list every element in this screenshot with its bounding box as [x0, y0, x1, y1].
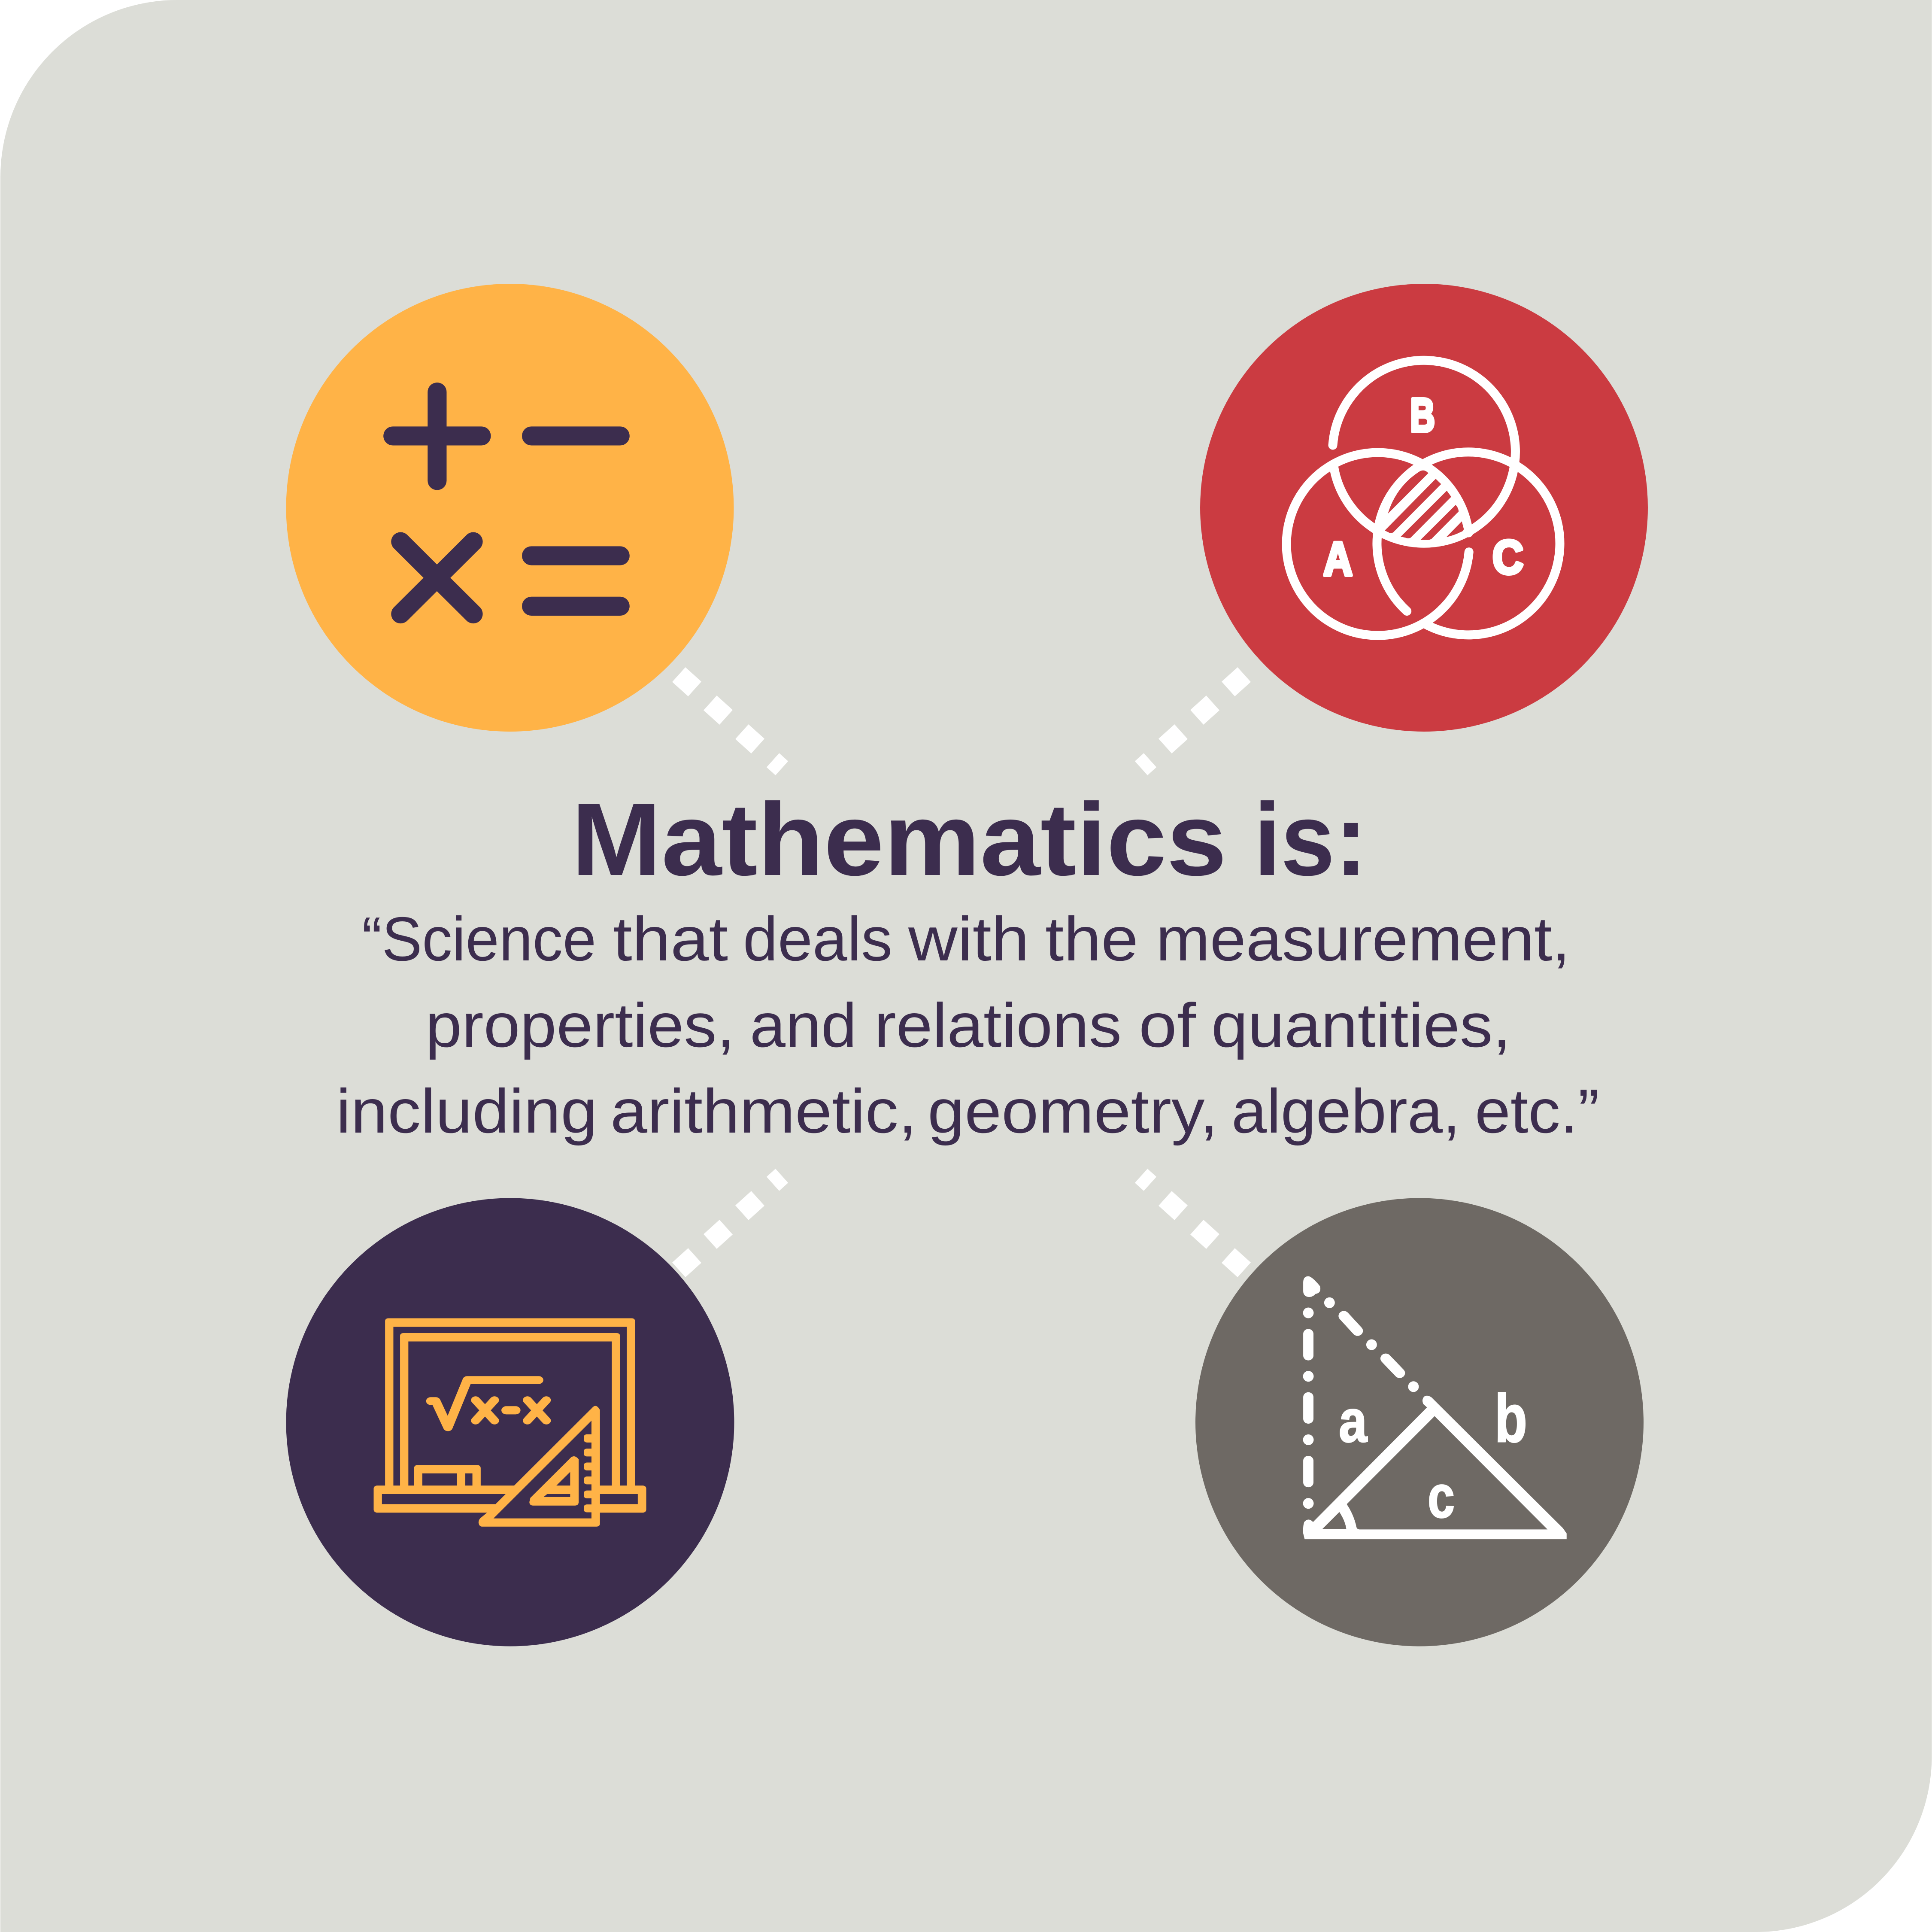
- quote text: of: [1139, 990, 1196, 1060]
- quote text: measurement,: [1156, 904, 1570, 974]
- label: a: a: [1339, 1387, 1368, 1455]
- icon: venn diagram: [1286, 360, 1560, 635]
- icon: plus, minus, times, equals: [393, 392, 620, 614]
- icon: right triangle with sides: [1303, 1276, 1567, 1539]
- label: B: B: [1410, 389, 1435, 442]
- dotted connector: bottom left: [672, 1169, 788, 1277]
- quote text: including: [336, 1076, 597, 1146]
- quote text: etc.”: [1475, 1076, 1599, 1146]
- panel: algebra circle: [286, 1198, 734, 1646]
- panel: set theory circle: [1200, 284, 1648, 732]
- panel: geometry circle: [1195, 1198, 1644, 1646]
- quote text: [336, 904, 1599, 1146]
- quote text: the: [1045, 904, 1138, 974]
- panel: arithmetic circle: [286, 284, 734, 732]
- label: A: A: [1323, 533, 1353, 586]
- title: Mathematics: [571, 782, 1227, 897]
- dotted connector: bottom right: [1135, 1169, 1251, 1277]
- quote text: with: [908, 904, 1029, 974]
- label: b: b: [1495, 1381, 1527, 1456]
- icon: chalkboard with set square: [374, 1318, 646, 1527]
- label: C: C: [1492, 531, 1523, 584]
- quote text: quantities,: [1211, 990, 1511, 1060]
- label: c: c: [1428, 1463, 1455, 1530]
- quote text: geometry,: [928, 1076, 1218, 1146]
- quote text: and: [750, 990, 857, 1060]
- dotted connector: top right: [1135, 667, 1251, 775]
- quote text: properties,: [425, 990, 735, 1060]
- quote text: that: [613, 904, 728, 974]
- quote text: “Science: [362, 904, 596, 974]
- title: is:: [1254, 782, 1367, 897]
- quote text: deals: [743, 904, 892, 974]
- quote text: algebra,: [1231, 1076, 1460, 1146]
- dotted connector: top left: [672, 667, 788, 775]
- quote text: arithmetic,: [610, 1076, 917, 1146]
- quote text: relations: [874, 990, 1122, 1060]
